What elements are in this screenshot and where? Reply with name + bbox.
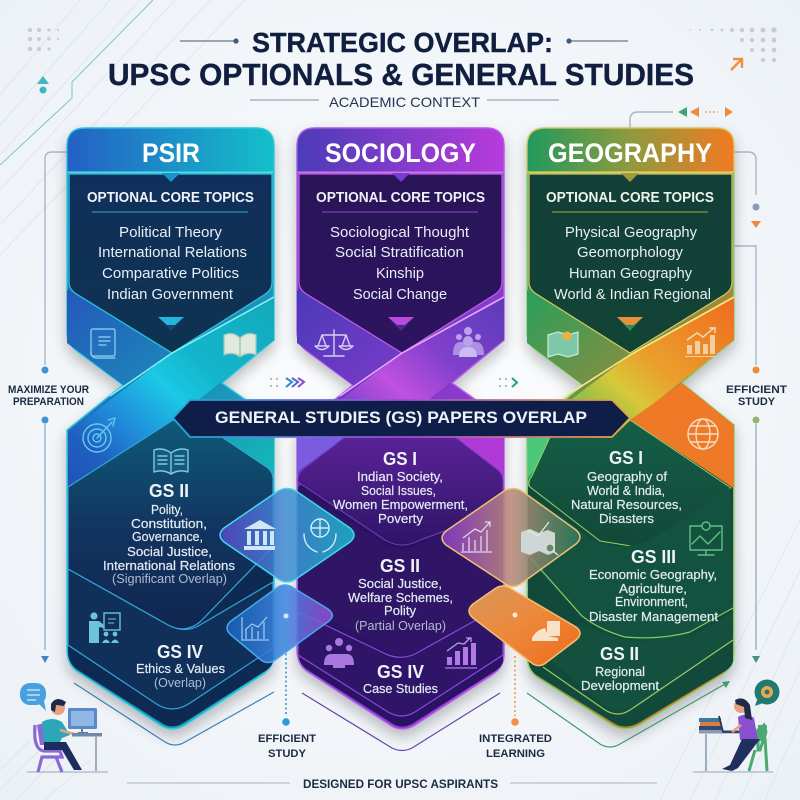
GS II text: Welfare Schemes, — [348, 591, 453, 605]
panel: GS IV — [298, 605, 503, 716]
illustration: student at desktop — [20, 683, 108, 772]
topic list: Geomorphology — [577, 244, 683, 261]
GS I text: Women Empowerment, — [333, 498, 468, 512]
GS II text: GS II — [149, 481, 189, 501]
card silhouette — [297, 128, 504, 729]
topic list: Sociological Thought — [330, 224, 470, 241]
icon: rising chart — [685, 328, 715, 357]
GS III text: Disaster Management — [589, 610, 719, 624]
GS I text: Social Issues, — [361, 484, 436, 498]
GS III text: GS III — [631, 547, 676, 567]
topic list: Social Stratification — [335, 244, 464, 261]
icon: teacher — [89, 612, 120, 643]
label: integrated learning: INTEGRATED — [479, 733, 552, 745]
icon: bar chart — [445, 638, 477, 668]
GS IV text: GS IV — [377, 662, 424, 682]
connector: left bottom — [41, 416, 49, 663]
subheading: OPTIONAL CORE TOPICS — [87, 190, 254, 206]
icon: book and hand — [532, 621, 560, 641]
GS II text: Social Justice, — [127, 545, 212, 559]
topic list — [98, 224, 247, 303]
topic list: Social Change — [353, 286, 447, 303]
upper dark panel — [69, 174, 272, 353]
heading: PSIR — [142, 138, 200, 168]
GS II text: Polity, — [151, 503, 183, 517]
header notch — [162, 173, 180, 182]
lower band — [67, 290, 274, 473]
band toward lower left — [298, 297, 504, 487]
dotted link: efficient study — [282, 614, 290, 726]
icon: group — [324, 638, 354, 668]
header notch — [621, 173, 639, 182]
topic list — [330, 224, 470, 303]
GS II text: Regional — [595, 665, 645, 679]
heading: GEOGRAPHY — [548, 138, 712, 168]
right lower accent — [455, 437, 504, 475]
GS III lower rim — [528, 555, 733, 638]
band highlight — [110, 297, 274, 396]
label: efficient study: EFFICIENT — [258, 733, 316, 745]
icon: open book — [224, 334, 256, 357]
subheading: OPTIONAL CORE TOPICS — [316, 190, 485, 206]
GS IV text — [363, 662, 438, 696]
connector: left top — [42, 152, 67, 374]
card silhouette — [67, 128, 274, 729]
subheading rule — [552, 211, 708, 213]
band highlight — [563, 297, 734, 398]
label: efficient study right — [726, 384, 787, 408]
label: integrated learning — [479, 733, 552, 760]
connector: right bottom — [752, 416, 760, 663]
GS II text: GS II — [380, 556, 420, 576]
subtitle: ACADEMIC CONTEXT — [329, 94, 480, 110]
band highlight — [340, 297, 504, 396]
title ornaments — [180, 38, 628, 44]
illustration: student with laptop — [693, 680, 780, 772]
topic list: Indian Government — [107, 286, 234, 303]
lower dark base — [298, 420, 503, 726]
location bubble — [754, 680, 780, 706]
label: efficient study right: EFFICIENT — [726, 384, 787, 396]
GS I text — [571, 448, 682, 526]
panel: GS I — [529, 420, 731, 547]
GS I text: GS I — [609, 448, 643, 468]
GS I text: Disasters — [599, 512, 654, 526]
topic list: Political Theory — [119, 224, 222, 241]
topic list: Comparative Politics — [102, 265, 239, 282]
GS II text: Governance, — [132, 530, 203, 544]
icon: map monitor — [690, 522, 722, 555]
subheading rule — [92, 211, 248, 213]
upper left green fill — [527, 437, 560, 478]
subheading: OPTIONAL CORE TOPICS — [546, 190, 714, 206]
lower band — [297, 290, 504, 473]
lower dark base — [68, 420, 273, 726]
icon: book — [91, 329, 115, 358]
header fill — [67, 128, 274, 172]
dotted link: integrated learning — [511, 612, 519, 726]
band toward lower left — [528, 297, 734, 480]
label: efficient study right: STUDY — [738, 396, 776, 408]
teal marker left — [37, 76, 49, 94]
panel: GS IV — [68, 569, 273, 709]
GS I text — [333, 449, 468, 526]
left lower accent — [297, 437, 345, 475]
topic list — [554, 224, 711, 303]
upper dark panel — [299, 174, 502, 353]
lower band — [527, 290, 734, 473]
GS IV text: Ethics & Values — [136, 662, 225, 676]
flow chevrons between PSIR and sociology — [270, 378, 304, 387]
topic list: Kinship — [376, 265, 424, 282]
icon: hands and globe — [304, 519, 336, 552]
outer outline with arrow — [527, 684, 725, 747]
panel: GS III — [528, 488, 733, 641]
topic list: International Relations — [98, 244, 247, 261]
GS IV text — [136, 642, 225, 690]
title line 2: UPSC OPTIONALS & GENERAL STUDIES — [108, 57, 694, 92]
overlap diamond: Sociology and Geography lower — [469, 586, 580, 666]
outline arrowhead — [722, 681, 730, 688]
GS I text: Geography of — [587, 470, 668, 484]
GS II text: (Significant Overlap) — [112, 572, 227, 586]
flow chevron between sociology and geography — [499, 378, 517, 387]
icon: map — [548, 332, 578, 357]
down marker — [158, 317, 184, 331]
GS I text: GS I — [383, 449, 417, 469]
overlap diamond: PSIR and Sociology lower — [227, 585, 332, 662]
down marker — [617, 317, 643, 331]
GS II text — [348, 556, 453, 633]
label: maximize your preparation — [8, 384, 89, 408]
icon: map magnifier — [521, 522, 558, 555]
label: efficient study: STUDY — [268, 748, 307, 760]
header divider — [68, 172, 273, 174]
label: efficient study — [258, 733, 316, 760]
column: PSIR — [67, 128, 274, 745]
GS II text: International Relations — [103, 559, 235, 573]
column: Sociology — [297, 128, 504, 750]
overlap diamond: PSIR and Sociology upper — [220, 488, 354, 582]
GS II text: (Partial Overlap) — [355, 619, 446, 633]
header fill — [297, 128, 504, 172]
down marker — [388, 317, 414, 331]
icon: scales — [315, 330, 353, 356]
card silhouette — [527, 128, 734, 729]
label: maximize your preparation: MAXIMIZE YOUR — [8, 384, 89, 396]
panel: GS II — [298, 490, 503, 656]
icon: globe — [688, 419, 718, 449]
topic list: World & Indian Regional — [554, 286, 711, 303]
GS I text: Indian Society, — [357, 470, 443, 484]
dot grid top-left — [28, 28, 59, 51]
header divider — [528, 172, 733, 174]
GS III text: Agriculture, — [619, 582, 687, 596]
chat bubble — [20, 683, 46, 711]
overlap diamond: Sociology and Geography upper — [442, 488, 580, 586]
subheading rule — [322, 211, 478, 213]
GS II text: Polity — [384, 604, 417, 618]
icon: open book lower — [154, 449, 188, 474]
GS II text: Social Justice, — [358, 577, 442, 591]
GS III text — [589, 547, 719, 624]
GS I text: Natural Resources, — [571, 498, 682, 512]
GS II text: Constitution, — [131, 517, 207, 531]
GS III text: Environment, — [615, 595, 688, 609]
header divider — [298, 172, 503, 174]
GS IV text: GS IV — [157, 642, 203, 662]
panel: GS I — [298, 437, 503, 545]
GS II text: GS II — [600, 644, 639, 664]
title — [108, 27, 694, 92]
GS III text: Economic Geography, — [589, 568, 717, 582]
topic list: Human Geography — [569, 265, 692, 282]
GS I text: Poverty — [378, 512, 424, 526]
GS II text: Development — [581, 679, 660, 693]
GS II text — [581, 644, 660, 693]
band toward lower left — [68, 297, 274, 487]
icon: line chart — [242, 617, 269, 640]
GS II lower rim — [543, 640, 733, 714]
icon: institution — [244, 520, 276, 550]
topic list: Physical Geography — [565, 224, 697, 241]
GS IV text: Case Studies — [363, 682, 438, 696]
header notch — [392, 173, 410, 182]
panel: GS II — [533, 612, 733, 712]
orange arrow top-right — [731, 59, 742, 70]
icon: rising chart — [461, 522, 492, 552]
dot grid top-right — [689, 27, 777, 62]
subtitle rules — [250, 99, 559, 101]
GS I text: World & India, — [587, 484, 665, 498]
outer outline — [302, 693, 500, 750]
GS II text — [103, 481, 235, 586]
banner title: GENERAL STUDIES (GS) PAPERS OVERLAP — [215, 408, 587, 427]
panel: GS II — [68, 420, 273, 629]
label: maximize your preparation: PREPARATION — [13, 396, 84, 408]
GS IV text: (Overlap) — [154, 676, 206, 690]
column: Geography — [527, 128, 734, 747]
lower dark base — [528, 420, 733, 726]
header fill — [527, 128, 734, 172]
title line 1: STRATEGIC OVERLAP: — [252, 27, 553, 58]
icon: target — [83, 418, 115, 452]
upper right orange fill — [630, 383, 734, 488]
connector: right top — [734, 152, 761, 374]
connector: geography top with arrows — [630, 107, 733, 128]
upper dark panel — [529, 174, 732, 353]
banner — [173, 400, 630, 437]
heading: SOCIOLOGY — [325, 138, 476, 168]
footer text: DESIGNED FOR UPSC ASPIRANTS — [303, 777, 498, 791]
outer outline — [74, 683, 274, 745]
icon: people — [453, 327, 484, 357]
label: integrated learning: LEARNING — [486, 748, 545, 760]
